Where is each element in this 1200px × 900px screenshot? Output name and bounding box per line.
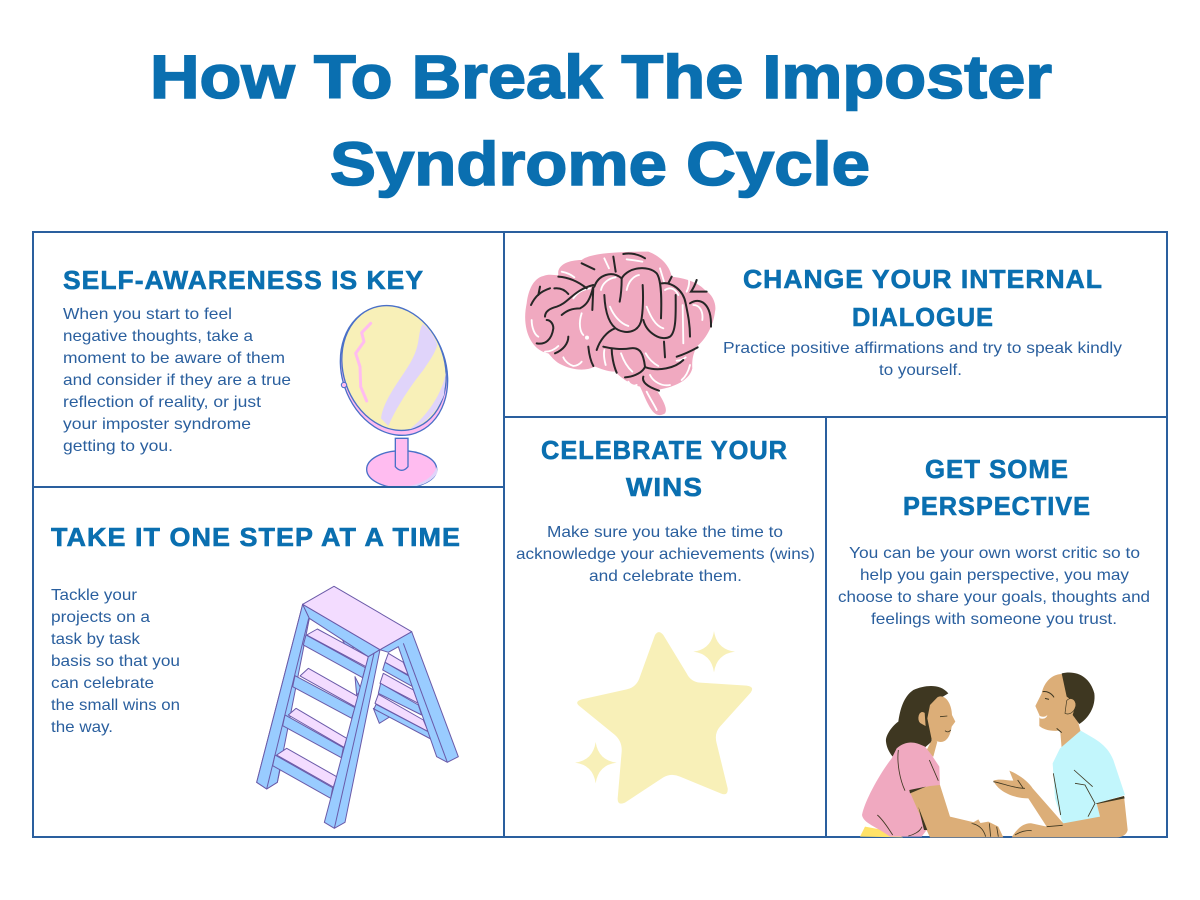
text: perspective body: help you gain perspective, you may [860, 567, 1129, 584]
text: one step body: Tackle your [51, 587, 137, 604]
title [150, 43, 1052, 198]
icon: mirror [323, 291, 465, 488]
heading: celebrate your wins: WINS [626, 472, 703, 502]
woman [860, 686, 1003, 837]
text: celebrate body: and celebrate them. [589, 568, 742, 585]
text: one step body: can celebrate [51, 675, 154, 692]
text: perspective body: choose to share your goals, thoughts and [838, 589, 1150, 606]
heading: change your internal dialogue [743, 264, 1103, 332]
heading: take it one step at a time: TAKE IT ONE STEP AT A TIME [51, 522, 461, 552]
heading: get some perspective: GET SOME [925, 454, 1069, 484]
text: celebrate body: acknowledge your achievements (wins) [516, 546, 815, 563]
panel: celebrate your wins [504, 417, 826, 837]
text: self-awareness body: your imposter syndrome [63, 416, 251, 433]
illustration: two people talking [860, 672, 1128, 837]
text: one step body: basis so that you [51, 653, 180, 670]
text: celebrate body [516, 524, 815, 585]
title: How To Break The Imposter [150, 43, 1052, 111]
text: self-awareness body: When you start to feel [63, 306, 232, 323]
panel: take it one step at a time [33, 487, 504, 837]
text: self-awareness body [63, 306, 291, 455]
text: one step body: projects on a [51, 609, 150, 626]
panel: get some perspective [826, 417, 1167, 837]
text: internal dialogue body: Practice positive affirmations and try to speak kindly [723, 340, 1122, 357]
icon: brain [525, 252, 715, 415]
heading: change your internal dialogue: DIALOGUE [852, 302, 994, 332]
text: perspective body: You can be your own worst critic so to [849, 545, 1140, 562]
text: one step body: the way. [51, 719, 113, 736]
man [993, 672, 1128, 837]
text: one step body: the small wins on [51, 697, 180, 714]
icon: star with sparkles [575, 631, 752, 804]
heading: get some perspective: PERSPECTIVE [903, 491, 1091, 521]
heading: celebrate your wins [541, 435, 788, 502]
text: internal dialogue body [723, 340, 1122, 379]
panel: self-awareness is key [33, 232, 504, 488]
text: self-awareness body: getting to you. [63, 438, 173, 455]
text: internal dialogue body: to yourself. [879, 362, 962, 379]
panel: change your internal dialogue [504, 232, 1167, 417]
text: one step body [51, 587, 180, 736]
title: Syndrome Cycle [330, 130, 870, 198]
heading: change your internal dialogue: CHANGE YOUR INTERNAL [743, 264, 1103, 294]
text: one step body: task by task [51, 631, 140, 648]
text: perspective body: feelings with someone you trust. [871, 611, 1117, 628]
icon: ladder [257, 586, 458, 828]
heading: get some perspective [903, 454, 1091, 521]
heading: celebrate your wins: CELEBRATE YOUR [541, 435, 788, 465]
text: self-awareness body: and consider if they are a true [63, 372, 291, 389]
text: celebrate body: Make sure you take the time to [547, 524, 783, 541]
text: self-awareness body: moment to be aware of them [63, 350, 285, 367]
text: perspective body [838, 545, 1150, 628]
heading: self-awareness is key: SELF-AWARENESS IS KEY [63, 265, 424, 295]
text: self-awareness body: reflection of reality, or just [63, 394, 262, 411]
text: self-awareness body: negative thoughts, take a [63, 328, 253, 345]
